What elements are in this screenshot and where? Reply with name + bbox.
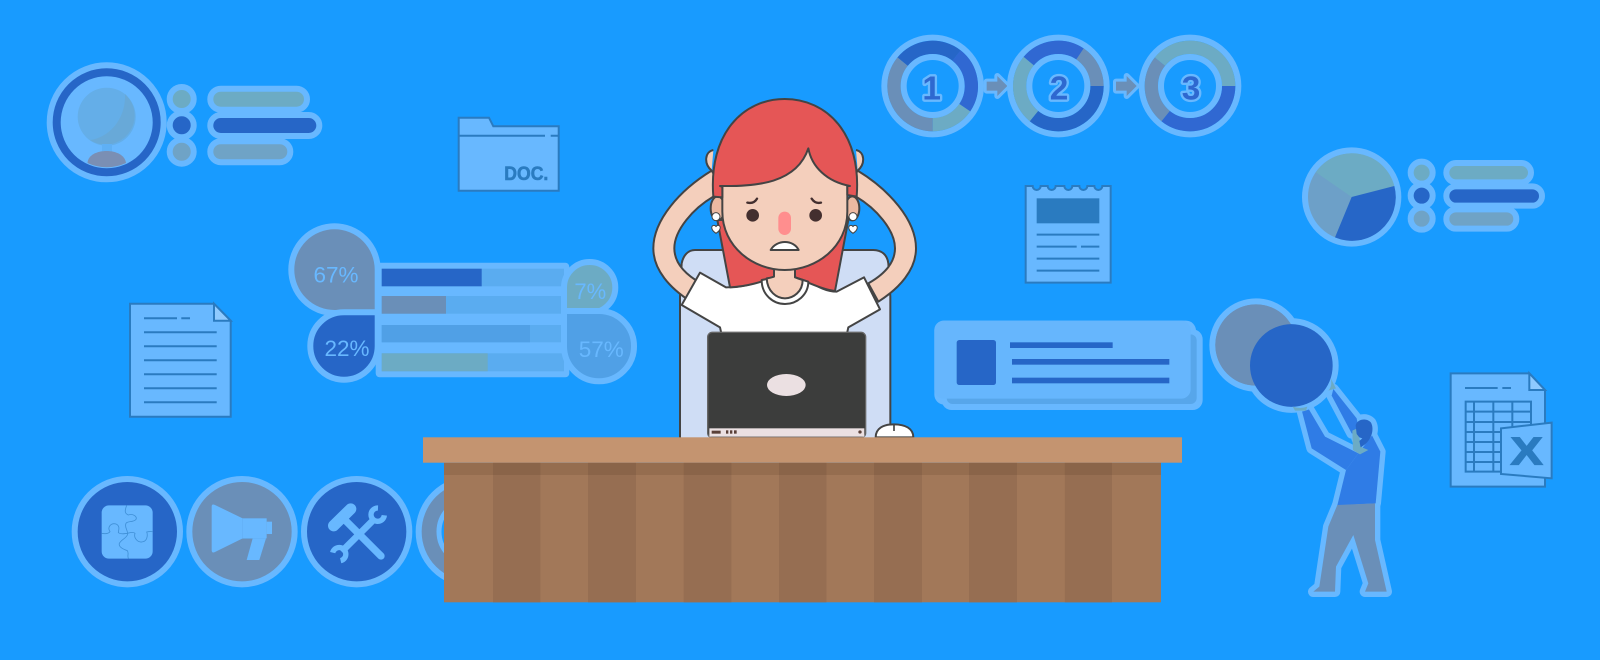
- left ear: [711, 196, 725, 220]
- icon: avatar: [50, 65, 164, 179]
- icon: receipt: [1026, 186, 1111, 283]
- desk shadow band: [444, 463, 1161, 475]
- spreadsheet grid: [1466, 402, 1531, 472]
- panel: avatar with legend: [50, 65, 319, 179]
- hair back: [717, 220, 848, 291]
- numbered process steps: [878, 32, 1244, 283]
- step 2 donut: [1004, 32, 1113, 140]
- icon: hammer and wrench: [304, 479, 409, 584]
- bubble: 57%: [564, 311, 634, 381]
- legend dots: [1411, 162, 1433, 230]
- desk top: [423, 437, 1182, 463]
- card image block: [957, 340, 996, 385]
- icon: DOC folder: [459, 118, 559, 191]
- icon: text document: [130, 304, 231, 417]
- icon: target partly hidden by desk: [419, 479, 524, 584]
- face: [722, 140, 847, 270]
- desk: [423, 437, 1182, 602]
- mouth: [771, 242, 799, 250]
- info card: [934, 321, 1203, 410]
- nose: [778, 212, 791, 235]
- step 1 donut: [878, 32, 987, 140]
- icon: puzzle: [75, 479, 180, 584]
- neck and collar: [762, 267, 808, 304]
- left earring: [712, 213, 720, 233]
- icon: megaphone: [189, 479, 295, 584]
- icon: excel file: [1451, 373, 1552, 487]
- bubble: 57%: 57%: [579, 337, 624, 362]
- dark blue circle: [1215, 304, 1336, 410]
- man body: [1302, 389, 1387, 592]
- bubble: 22%: 22%: [324, 336, 370, 361]
- bubble: 7%: [564, 262, 615, 313]
- office chair: [680, 250, 890, 440]
- legend bars: [210, 89, 319, 162]
- panel: percentage bar chart: [291, 226, 634, 381]
- laptop: [708, 332, 866, 438]
- step 3 donut: 3: [1182, 70, 1200, 107]
- computer mouse: [876, 424, 913, 437]
- eyebrows: [747, 199, 821, 203]
- figure: man holding up circles: [1212, 301, 1387, 592]
- eyes: [746, 209, 822, 222]
- left arm: [653, 150, 717, 302]
- right arm: [852, 150, 916, 302]
- step 3 donut: [1136, 32, 1244, 140]
- excel sheet cover: [1501, 423, 1552, 478]
- card text lines: [1010, 342, 1169, 383]
- bubble: 67%: [291, 226, 378, 313]
- right ear: [845, 196, 859, 220]
- excel X letter: X: [1511, 430, 1543, 474]
- right earring: [849, 213, 857, 233]
- pie chart: [1305, 150, 1398, 244]
- hands: [1293, 378, 1336, 411]
- desk stripes: [493, 463, 1112, 602]
- legend dots: [170, 87, 194, 164]
- hair front with bangs: [713, 99, 857, 197]
- panel: pie chart with legend: [1305, 150, 1542, 244]
- arrow to step 2: [987, 76, 1007, 96]
- arrow to step 3: [1116, 76, 1137, 96]
- folder label: DOC.: [504, 164, 548, 185]
- man outline halo: [1302, 389, 1387, 592]
- bar panel: [376, 263, 569, 377]
- legend bars: [1446, 163, 1542, 229]
- desk body: [444, 463, 1161, 602]
- figure: stressed woman at laptop: [653, 99, 916, 440]
- t-shirt: [682, 273, 880, 335]
- bubble: 22%: [310, 312, 378, 380]
- grey circle: [1212, 301, 1300, 389]
- step 1 donut: 1: [922, 70, 941, 107]
- bubble: 67%: 67%: [313, 263, 359, 288]
- step 2 donut: 2: [1050, 70, 1068, 107]
- bubble: 7%: 7%: [574, 279, 606, 304]
- row of round tool icons: [75, 479, 524, 584]
